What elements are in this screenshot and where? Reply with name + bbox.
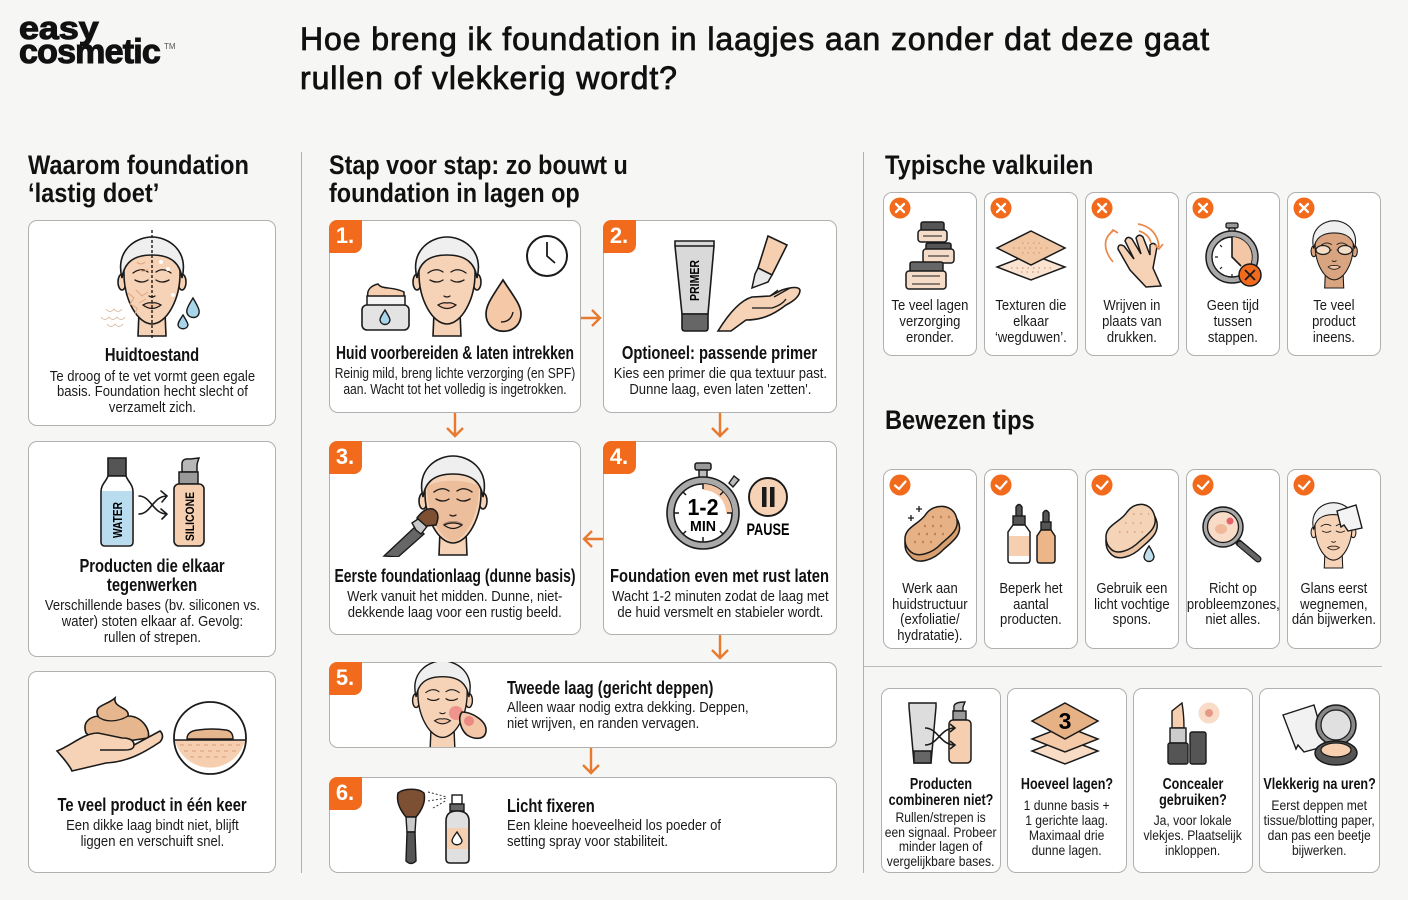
text: Kies een primer die qua textuur past. xyxy=(613,365,827,382)
text: liggen en verschuift snel. xyxy=(80,833,224,850)
icon: cross badge xyxy=(990,198,1012,218)
icon: primer tube and hand xyxy=(674,234,801,332)
text: aan. Wacht tot het volledig is ingetrokken. xyxy=(343,381,567,398)
text: Gebruik een xyxy=(1096,580,1168,597)
text: tissue/blotting paper, xyxy=(1264,812,1375,828)
divider: left xyxy=(301,152,302,873)
text: verzamelt zich. xyxy=(108,398,196,416)
logo: easy cosmetic xyxy=(19,10,176,71)
text: niet wrijven, en randen vervagen. xyxy=(507,715,699,732)
heading: typische valkuilen: Typische valkuilen xyxy=(885,150,1093,180)
text xyxy=(892,297,968,346)
icon: two textures xyxy=(995,230,1067,281)
text: 1 dunne basis + xyxy=(1024,797,1110,813)
badge: step number: 1. xyxy=(336,223,354,248)
text: water) stoten elkaar af. Gevolg: xyxy=(61,613,243,630)
panel: step 3 xyxy=(329,441,581,635)
icon: face with sponge xyxy=(412,662,487,747)
logo word: easy: easy xyxy=(19,10,99,46)
heading: Huidtoestand xyxy=(105,345,199,365)
text xyxy=(1259,798,1380,858)
text xyxy=(1288,298,1380,346)
badge: step number: 4. xyxy=(610,444,628,469)
text: dekkende laag voor een rustig beeld. xyxy=(348,604,562,621)
text xyxy=(1133,813,1253,858)
text xyxy=(507,817,721,850)
text: setting spray voor stabiliteit. xyxy=(507,833,668,850)
panel: step 4 xyxy=(603,441,837,635)
panel: tip 4 xyxy=(1186,469,1280,649)
icon: check badge xyxy=(1293,474,1315,496)
text xyxy=(335,365,575,398)
icon: face with blotting tissue xyxy=(1306,502,1368,569)
text: Een kleine hoeveelheid los poeder of xyxy=(507,817,721,834)
text xyxy=(507,699,749,732)
text: bijwerken. xyxy=(1292,842,1347,858)
text: dunne lagen. xyxy=(1032,842,1102,858)
text: Geen tijd xyxy=(1207,297,1259,314)
heading xyxy=(1137,777,1250,809)
text xyxy=(1187,298,1279,346)
heading: stap voor stap xyxy=(329,150,628,208)
icon: check badge xyxy=(990,474,1012,496)
heading: bewezen tips: Bewezen tips xyxy=(885,405,1035,435)
text xyxy=(347,588,563,621)
badge: step number xyxy=(329,441,362,474)
heading: gebruiken? xyxy=(1159,792,1227,809)
icon: rubbing hand xyxy=(1104,223,1164,288)
icon: stopwatch and pause: 1-2 xyxy=(688,494,718,520)
text: dán bijwerken. xyxy=(1292,611,1376,628)
text xyxy=(1086,581,1178,628)
heading: Hoeveel lagen? xyxy=(1021,776,1113,793)
text: huidstructuur xyxy=(892,596,968,613)
text: Eerst deppen met xyxy=(1272,797,1367,813)
heading: tegenwerken xyxy=(107,575,197,595)
text: Alleen waar nodig extra dekking. Deppen, xyxy=(507,699,749,716)
text xyxy=(613,365,827,398)
panel: te veel product in een keer xyxy=(28,671,276,873)
panel: faq concealer xyxy=(1133,688,1253,873)
badge: step number: 3. xyxy=(336,444,354,469)
text xyxy=(884,581,976,644)
title: Hoe breng ik foundation in laagjes aan zonder dat deze gaat xyxy=(300,21,1210,57)
text: basis. Foundation hecht slecht of xyxy=(57,383,247,400)
text: een signaal. Probeer xyxy=(885,824,997,840)
heading: Huid voorbereiden & laten intrekken xyxy=(336,343,574,363)
text xyxy=(1007,798,1127,858)
text: stappen. xyxy=(1208,329,1258,346)
panel: pitfall 1 xyxy=(883,192,977,356)
text xyxy=(881,810,1001,869)
text xyxy=(1102,297,1162,346)
text xyxy=(44,597,260,646)
text xyxy=(1187,581,1279,628)
text: vlekjes. Plaatselijk xyxy=(1144,827,1242,843)
heading: waarom foundation lastig doet: ‘lastig doet’ xyxy=(28,178,159,208)
text xyxy=(612,588,829,621)
arrow: step 1 to 3 xyxy=(446,413,464,438)
icon: check badge xyxy=(1091,474,1113,496)
text: Beperk het xyxy=(999,580,1063,597)
icon: blotting paper and compact xyxy=(1282,702,1360,767)
text: (exfoliatie/ xyxy=(900,611,960,628)
icon: stopwatch and pause: MIN xyxy=(690,518,716,535)
panel: faq products xyxy=(881,688,1001,873)
icon: stacked jars xyxy=(905,221,955,290)
icon: cross badge xyxy=(1192,198,1214,218)
text: Werk aan xyxy=(902,580,958,597)
text: Wrijven in xyxy=(1103,297,1161,314)
panel: huidtoestand xyxy=(28,220,276,426)
heading: stap voor stap: foundation in lagen op xyxy=(329,178,580,208)
icon: check badge xyxy=(1192,474,1214,496)
icon: magnifier on blemish xyxy=(1201,504,1265,564)
heading: Producten xyxy=(910,776,972,793)
badge: step number: 2. xyxy=(610,223,628,248)
divider: right xyxy=(863,152,864,873)
panel: step 1 xyxy=(329,220,581,413)
icon: moist sponge xyxy=(1104,502,1164,566)
text: 1 gerichte laag. xyxy=(1026,812,1108,828)
icon: cross badge xyxy=(1092,198,1112,218)
panel: pitfall 2 xyxy=(984,192,1078,356)
text: aantal xyxy=(1013,596,1049,613)
text: Werk vanuit het midden. Dunne, niet- xyxy=(347,588,563,605)
icon: concealer and spot xyxy=(1166,702,1256,766)
text: niet alles. xyxy=(1205,611,1261,628)
icon: cross badge xyxy=(890,198,910,218)
text xyxy=(985,581,1077,628)
text: wegnemen, xyxy=(1300,596,1368,613)
icon: water and silicone bottles: WATER xyxy=(111,502,125,538)
badge: step number xyxy=(603,220,636,253)
badge: step number xyxy=(329,777,362,810)
text: Wacht 1-2 minuten zodat de laag met xyxy=(612,588,828,605)
arrow: step 4 to 3 xyxy=(582,530,603,548)
text xyxy=(995,297,1067,346)
icon: sponge with sparkles xyxy=(903,502,963,562)
badge: step number: 6. xyxy=(336,780,354,805)
badge: step number xyxy=(329,220,362,253)
heading: Producten die elkaar xyxy=(79,556,225,576)
badge: step number: 5. xyxy=(336,665,354,690)
text: minder lagen of xyxy=(899,838,983,854)
text: product xyxy=(1312,313,1356,330)
text: Glans eerst xyxy=(1301,580,1367,597)
heading: combineren niet? xyxy=(889,792,993,809)
arrow: step 1 to 2 xyxy=(581,309,602,327)
icon: face with brush xyxy=(382,455,488,557)
heading: stap voor stap: Stap voor stap: zo bouwt u xyxy=(329,150,628,180)
text: Ja, voor lokale xyxy=(1154,812,1232,828)
icon: tube, bottle and crossing arrows xyxy=(906,701,976,765)
heading: Te veel product in één keer xyxy=(57,795,247,815)
text: elkaar xyxy=(1013,313,1049,330)
text: de huid versmelt en stabieler wordt. xyxy=(617,604,823,621)
icon: three layers: 3 xyxy=(1059,708,1071,734)
panel: tip 3 xyxy=(1085,469,1179,649)
icon: powder brush and setting spray xyxy=(396,788,470,864)
heading: Tweede laag (gericht deppen) xyxy=(507,678,713,698)
text: Een dikke laag bindt niet, blijft xyxy=(66,817,238,834)
icon: cross badge xyxy=(1293,197,1315,219)
icon: water and silicone bottles: SILICONE xyxy=(185,492,197,541)
divider: horizontal xyxy=(864,666,1382,667)
text: vergelijkbare bases. xyxy=(887,853,995,869)
panel: tip 1 xyxy=(883,469,977,649)
title: rullen of vlekkerig wordt? xyxy=(300,60,678,96)
text: Verschillende bases (bv. siliconen vs. xyxy=(44,597,260,614)
icon: check badge xyxy=(889,474,911,496)
arrow: step 2 to 4 xyxy=(711,413,729,438)
icon: stopwatch and pause xyxy=(666,462,790,550)
panel: step 2 xyxy=(603,220,837,413)
text: spons. xyxy=(1113,611,1151,628)
text: inkloppen. xyxy=(1165,842,1221,858)
title xyxy=(300,21,1210,96)
heading: Optioneel: passende primer xyxy=(622,343,818,363)
icon: hand with product and skin cross section xyxy=(56,696,247,775)
text: Dunne laag, even laten 'zetten'. xyxy=(629,381,811,398)
text: ‘wegduwen’. xyxy=(995,329,1067,346)
icon: primer tube and hand: PRIMER xyxy=(687,260,702,301)
icon: three layers xyxy=(1030,701,1100,766)
icon: half dry half oily face xyxy=(100,230,200,338)
icon: face with too much product xyxy=(1305,219,1365,289)
text: hydratatie). xyxy=(897,627,963,644)
heading: Licht fixeren xyxy=(507,796,595,816)
icon: stopwatch with cross xyxy=(1205,222,1262,287)
text: Te veel xyxy=(1313,297,1355,314)
logo word: cosmetic: cosmetic xyxy=(19,33,160,71)
text: Te veel lagen xyxy=(892,297,968,314)
heading: Eerste foundationlaag (dunne basis) xyxy=(334,566,576,586)
panel: pitfall 4 xyxy=(1186,192,1280,356)
text xyxy=(1288,581,1380,628)
heading: Vlekkerig na uren? xyxy=(1263,776,1376,793)
text: licht vochtige xyxy=(1094,596,1170,613)
text: Te droog of te vet vormt geen egale xyxy=(49,368,255,384)
text: probleemzones, xyxy=(1187,596,1280,613)
panel: tip 5 xyxy=(1287,469,1381,649)
heading: Foundation even met rust laten xyxy=(611,566,829,586)
logo trademark: TM xyxy=(164,42,176,51)
panel: faq layers xyxy=(1007,688,1127,873)
panel: pitfall 3 xyxy=(1085,192,1179,356)
text: dan pas een beetje xyxy=(1268,827,1371,843)
badge: step number xyxy=(329,662,362,695)
text: plaats van xyxy=(1102,313,1162,330)
text xyxy=(66,817,239,850)
panel: pitfall 5 xyxy=(1287,192,1381,356)
panel: tip 2 xyxy=(984,469,1078,649)
text: Rullen/strepen is xyxy=(896,809,986,825)
text: Maximaal drie xyxy=(1029,827,1105,843)
text: ineens. xyxy=(1313,329,1355,346)
text: rullen of strepen. xyxy=(103,629,201,646)
text: tussen xyxy=(1214,313,1252,330)
text: drukken. xyxy=(1107,329,1157,346)
icon: cream jar, face, drop, clock xyxy=(361,235,568,337)
text: Richt op xyxy=(1209,580,1257,597)
heading: waarom foundation lastig doet: Waarom foundation xyxy=(28,150,249,180)
arrow: step 4 to 5 xyxy=(711,635,729,660)
text: producten. xyxy=(1000,611,1062,628)
heading: Concealer xyxy=(1163,776,1223,793)
icon: water and silicone bottles xyxy=(100,457,205,547)
panel: producten die elkaar tegenwerken xyxy=(28,441,276,657)
text: Reinig mild, breng lichte verzorging (en SPF) xyxy=(335,365,575,382)
heading: waarom foundation lastig doet xyxy=(28,150,249,208)
text xyxy=(49,368,255,416)
arrow: step 5 to 6 xyxy=(582,748,600,775)
text: eronder. xyxy=(906,329,954,346)
text: Texturen die xyxy=(995,297,1067,314)
panel: step 6 xyxy=(329,777,837,873)
heading xyxy=(885,777,998,809)
panel: step 5 xyxy=(329,662,837,748)
text: verzorging xyxy=(900,313,960,330)
icon: two dropper bottles xyxy=(1006,502,1056,565)
panel: faq blotchy xyxy=(1259,688,1380,873)
badge: step number xyxy=(603,441,636,474)
heading xyxy=(79,556,225,595)
